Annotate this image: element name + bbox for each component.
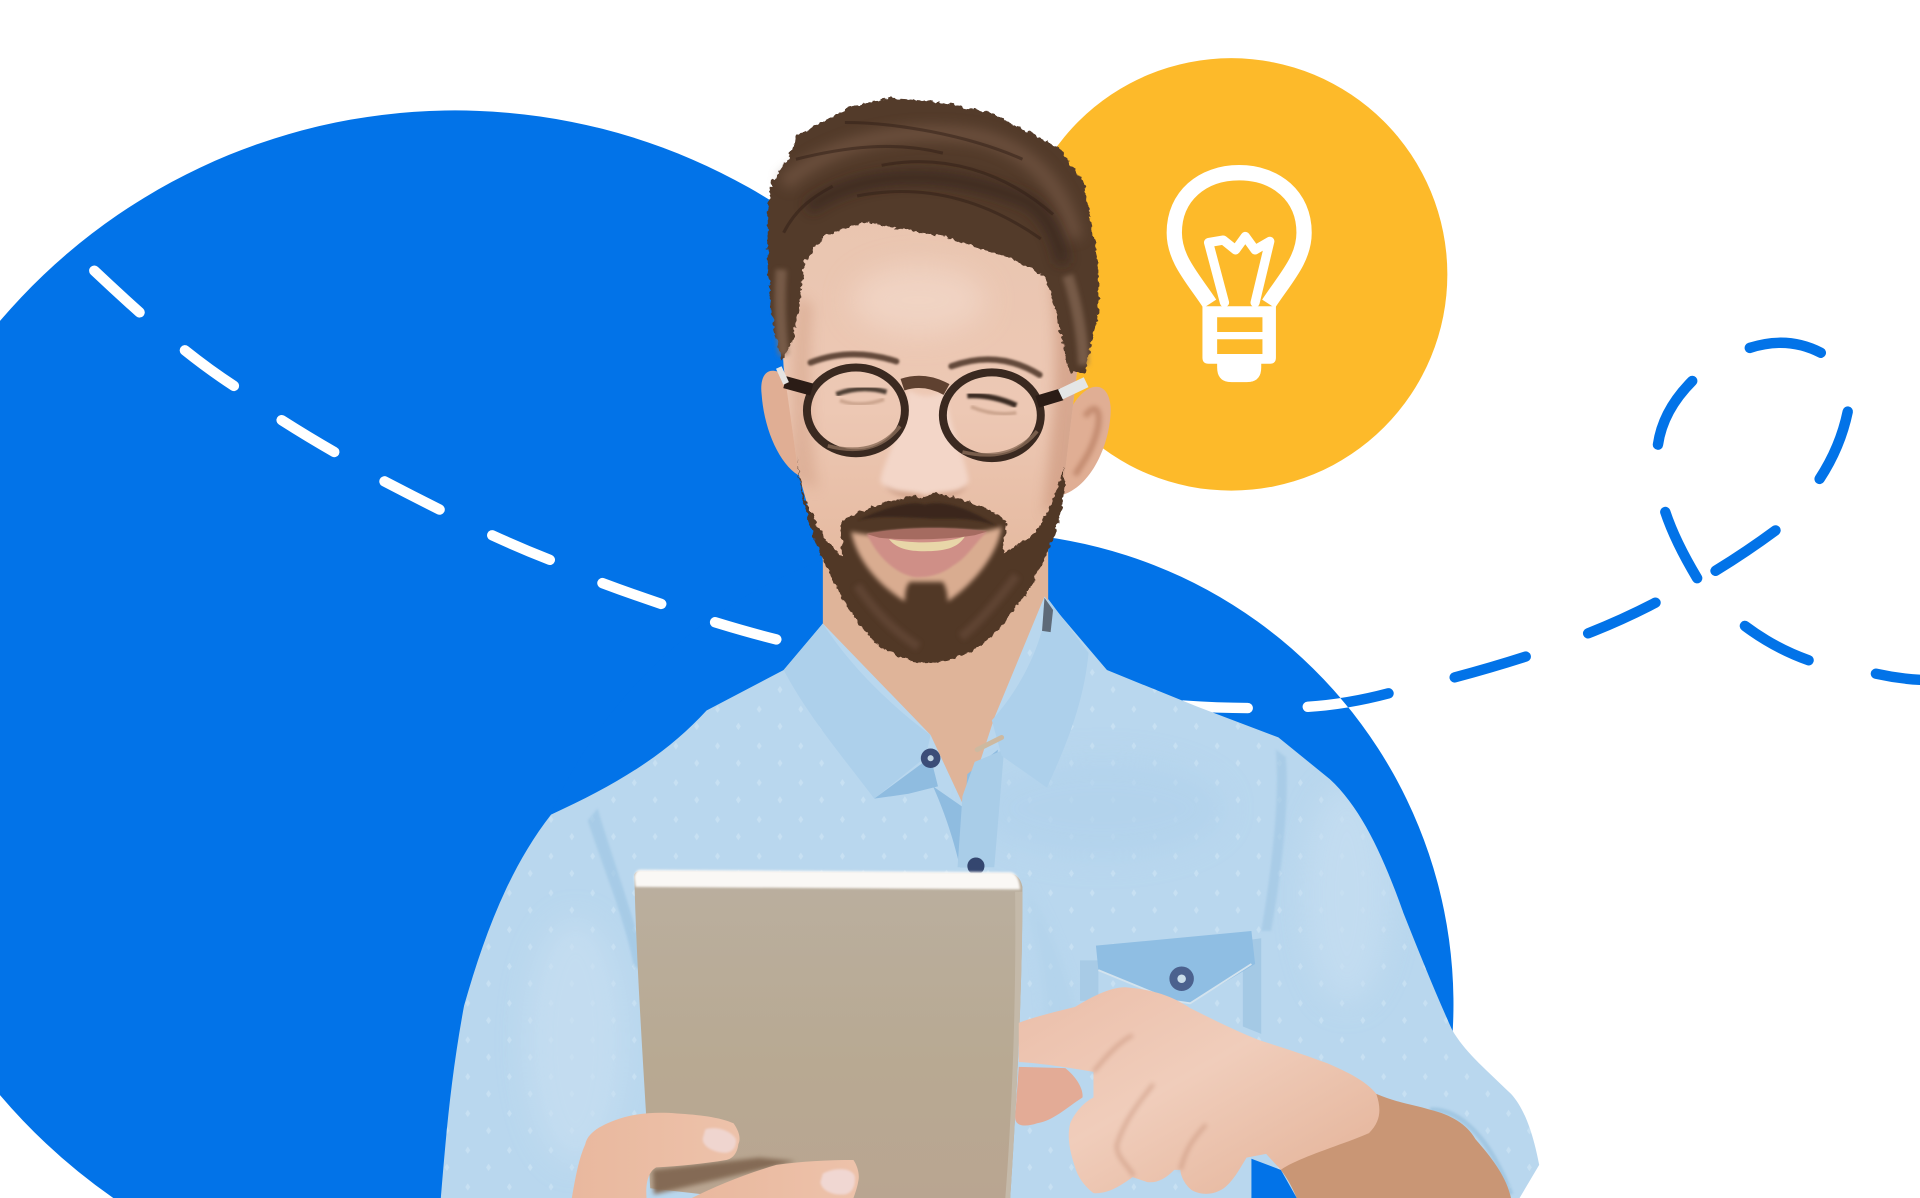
bent finger	[1015, 1067, 1083, 1126]
forearm	[1281, 1094, 1511, 1198]
placket	[933, 750, 998, 867]
blue dash crossing the circle edge	[1308, 693, 1389, 707]
eyes	[836, 389, 1016, 414]
left collar	[784, 623, 931, 799]
hair	[768, 98, 1098, 374]
nose	[880, 390, 969, 495]
shirt	[441, 597, 1543, 1198]
man	[441, 98, 1543, 1198]
neck	[823, 539, 1048, 808]
icon: light bulb	[1174, 173, 1304, 382]
face	[783, 208, 1090, 560]
right collar	[992, 599, 1089, 788]
hand: left, holding tablet	[572, 1113, 859, 1198]
tablet	[634, 870, 1022, 1198]
glasses	[779, 367, 1086, 458]
shirt pocket	[1080, 931, 1261, 1034]
icon: shirt buttons	[921, 737, 1002, 875]
back of hand and fingers	[1019, 987, 1379, 1194]
dashed flight path: white section on blue	[94, 271, 1389, 708]
ears	[761, 371, 1111, 495]
yellow circle with bulb	[1015, 58, 1447, 491]
mouth	[867, 528, 987, 577]
hand: right, pointing at tablet	[1015, 987, 1511, 1198]
dashed flight path: blue loop section	[1455, 343, 1920, 680]
skin patch around mouth	[851, 527, 1002, 601]
background: blue blob	[0, 110, 1453, 1198]
eyebrows	[811, 354, 1040, 375]
beard	[797, 456, 1065, 663]
